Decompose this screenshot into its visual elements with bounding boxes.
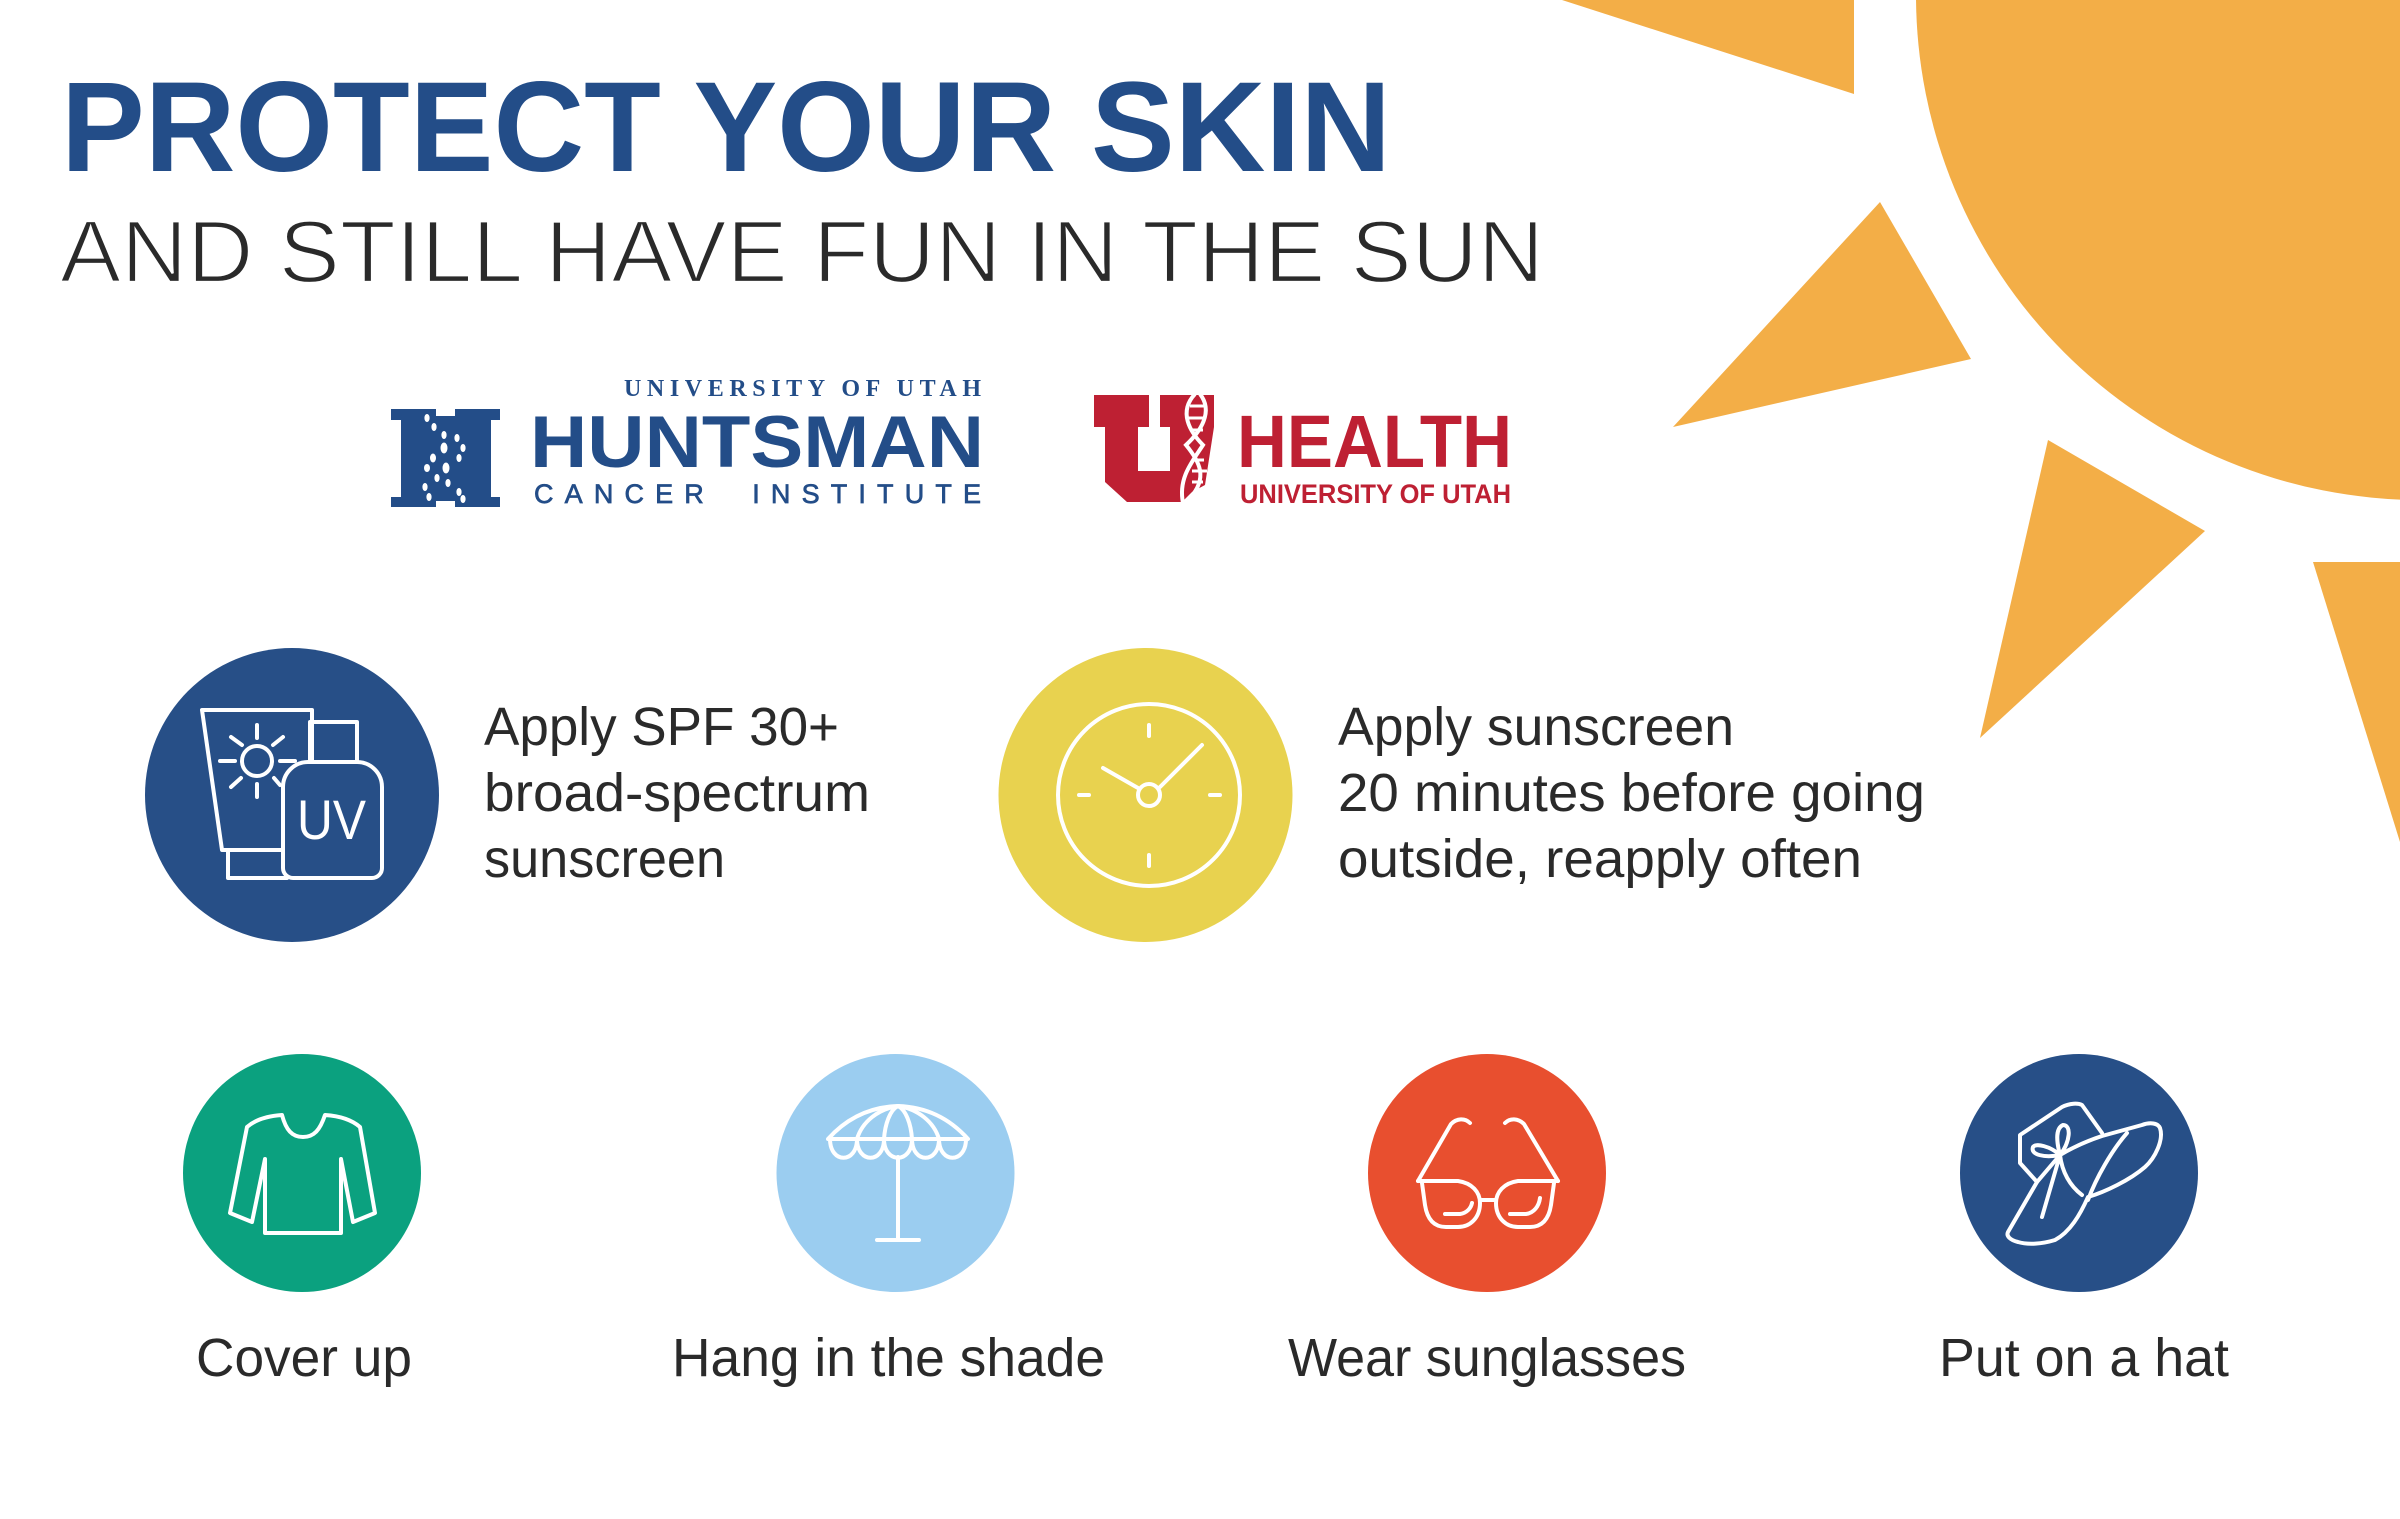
title: PROTECT YOUR SKIN xyxy=(61,56,1391,199)
tip: apply SPF sunscreen xyxy=(145,648,870,942)
icon: Huntsman H mark xyxy=(391,409,500,507)
tip: wear sunglasses xyxy=(1288,1054,1686,1388)
logo text: Health: HEALTH xyxy=(1237,400,1512,483)
sun illustration xyxy=(1562,0,2400,842)
text: apply SPF: sunscreen xyxy=(484,829,725,889)
text: apply sunscreen timing: outside, reapply often xyxy=(1338,829,1862,889)
tip: apply 20 minutes before xyxy=(998,648,1925,942)
label: put on a hat: Put on a hat xyxy=(1939,1328,2229,1388)
subtitle: AND STILL HAVE FUN IN THE SUN xyxy=(60,202,1544,301)
logo text: University of Utah serif: UNIVERSITY OF UTAH xyxy=(624,376,981,402)
icon: block U with DNA strand xyxy=(1094,394,1214,503)
icon: clock xyxy=(998,648,1292,942)
sun ray 4 xyxy=(2313,562,2400,842)
text: apply SPF: broad-spectrum xyxy=(484,763,870,823)
logo: Huntsman Cancer Institute xyxy=(391,376,984,509)
sun ray 3 xyxy=(1980,440,2205,738)
icon: sun hat xyxy=(1960,1054,2198,1292)
sun ray 1 xyxy=(1562,0,1854,94)
text: apply SPF: Apply SPF 30+ xyxy=(484,697,839,757)
logo text: University of Utah: UNIVERSITY OF UTAH xyxy=(1240,479,1511,509)
tip: put on a hat xyxy=(1939,1054,2229,1388)
logo text: Cancer Institute: CANCER INSTITUTE xyxy=(534,479,981,509)
text: apply sunscreen timing: Apply sunscreen xyxy=(1338,697,1734,757)
text: apply sunscreen timing xyxy=(1338,697,1925,889)
sun ray 2 xyxy=(1673,202,1971,427)
icon: sunscreen bottles: UV xyxy=(297,788,367,851)
label: cover up: Cover up xyxy=(196,1328,412,1388)
tip: hang in the shade xyxy=(672,1054,1105,1388)
icon: beach umbrella xyxy=(776,1054,1014,1292)
tip: cover up xyxy=(183,1054,421,1388)
icon: sunglasses xyxy=(1368,1054,1606,1292)
logo text: Huntsman: HUNTSMAN xyxy=(530,402,984,483)
text: apply SPF xyxy=(484,697,870,889)
icon: long sleeve shirt xyxy=(183,1054,421,1292)
icon: sunscreen bottles xyxy=(145,648,439,942)
label: wear sunglasses: Wear sunglasses xyxy=(1288,1328,1686,1388)
logo: University of Utah Health xyxy=(1094,394,1512,509)
sun disc xyxy=(1916,0,2400,500)
text: apply sunscreen timing: 20 minutes before going xyxy=(1338,763,1925,823)
label: hang in the shade: Hang in the shade xyxy=(672,1328,1105,1388)
